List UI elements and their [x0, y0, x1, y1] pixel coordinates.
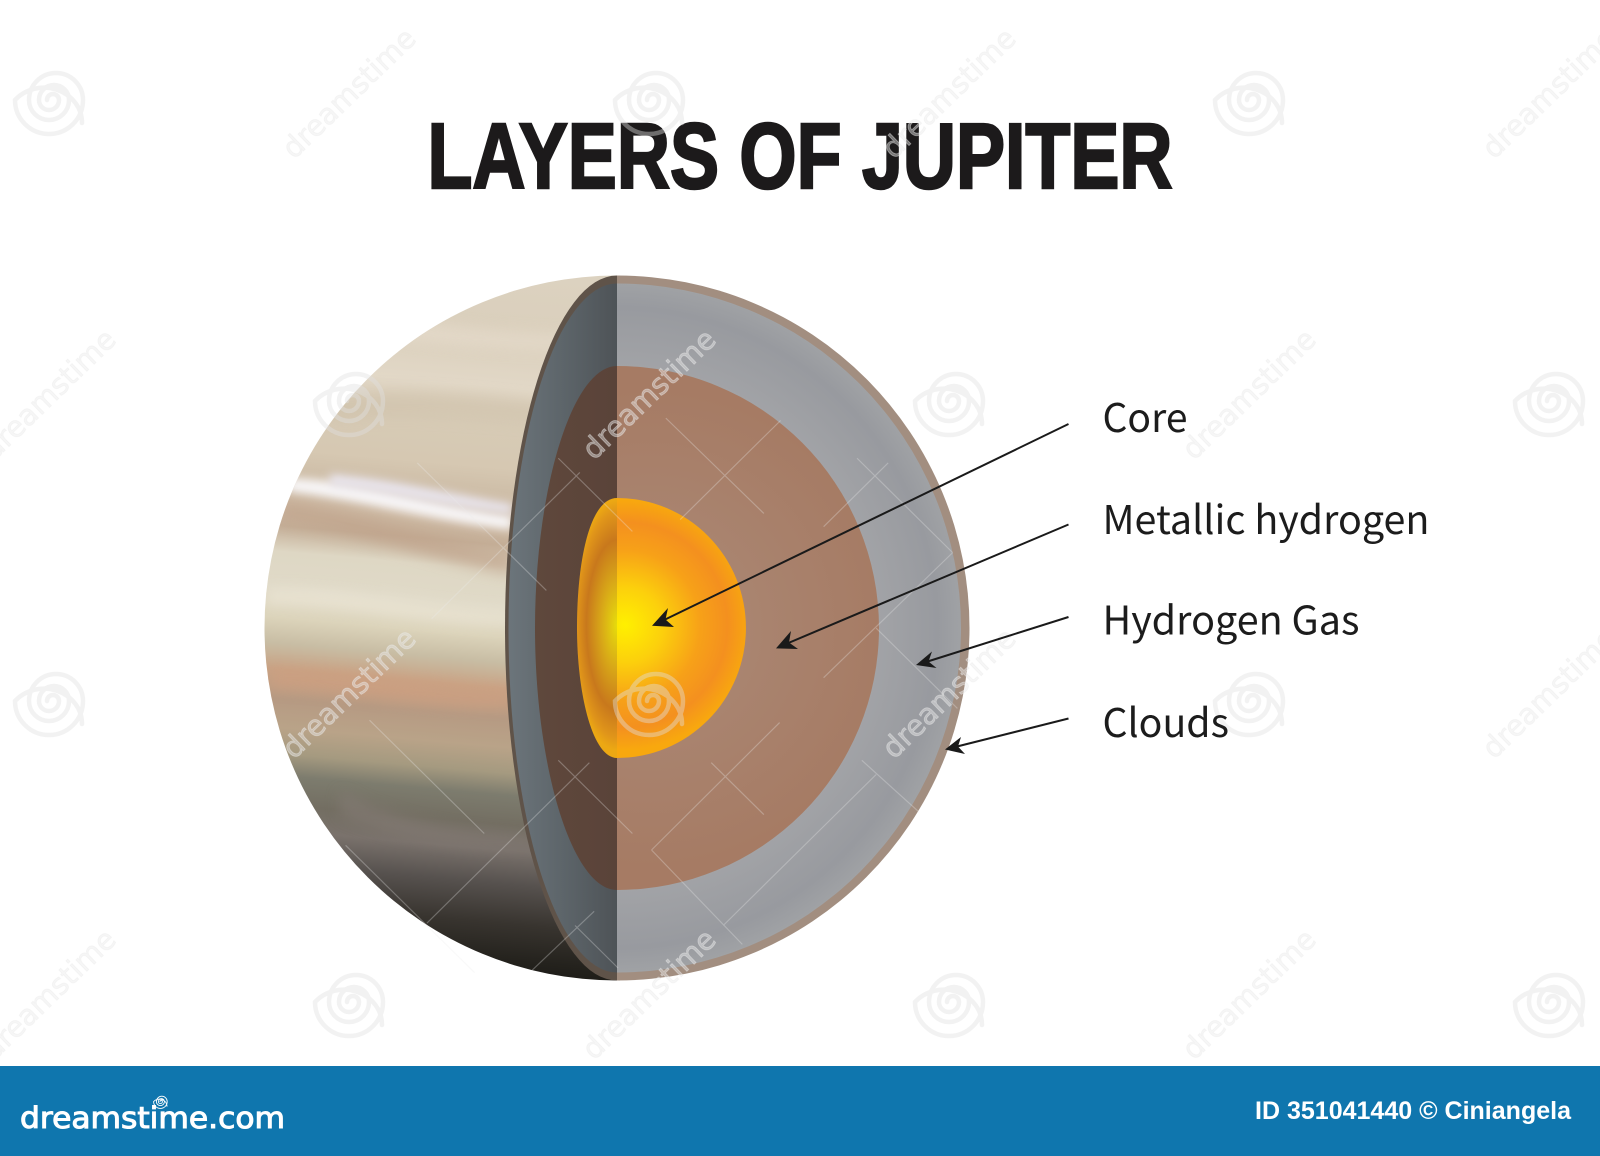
- arrow: hydrogen gas: [916, 617, 1068, 668]
- cutaway core face: [577, 498, 617, 758]
- label: hydrogen gas: Hydrogen Gas: [1102, 590, 1360, 646]
- watermark overlay: dreamstime: [1175, 922, 1323, 1066]
- planet surface with cloud bands: [260, 270, 620, 985]
- labels: [1102, 387, 1430, 749]
- label: metallic hydrogen: Metallic hydrogen: [1102, 489, 1430, 546]
- icon: footer logo spiral: [154, 1096, 167, 1108]
- label: clouds: Clouds: [1102, 692, 1229, 749]
- watermark overlay: dreamstime: [1175, 322, 1323, 466]
- planet cross-section diagram: [260, 270, 970, 985]
- metallic hydrogen layer: [617, 366, 879, 890]
- cutaway hydrogen gas face: [508, 284, 617, 972]
- watermark overlay: dreamstime: [875, 621, 1023, 765]
- arrow: core: [652, 424, 1068, 627]
- outer clouds shell: [617, 276, 970, 980]
- watermark overlay: dreamstime: [875, 21, 1023, 165]
- cutaway left shell rim: [505, 276, 617, 980]
- cutaway metallic hydrogen face: [535, 366, 617, 890]
- footer logo text: dreamstime.com: [20, 1101, 285, 1135]
- title: LAYERS OF JUPITER: [428, 104, 1172, 208]
- label: core: Core: [1102, 387, 1188, 444]
- arrow: clouds: [945, 718, 1068, 754]
- watermark overlay: dreamstime: [275, 21, 423, 165]
- footer bar: [0, 1066, 1600, 1156]
- watermark overlay: dreamstime: [575, 922, 723, 1066]
- core: [617, 498, 746, 758]
- watermark overlay: dreamstime: [275, 621, 423, 765]
- hydrogen gas layer: [617, 284, 961, 972]
- arrow: metallic hydrogen: [776, 524, 1068, 649]
- footer image id and credit: ID 351041440 © Ciniangela: [1255, 1097, 1572, 1125]
- watermark overlay: dreamstime: [575, 322, 723, 466]
- arrows: [652, 424, 1068, 754]
